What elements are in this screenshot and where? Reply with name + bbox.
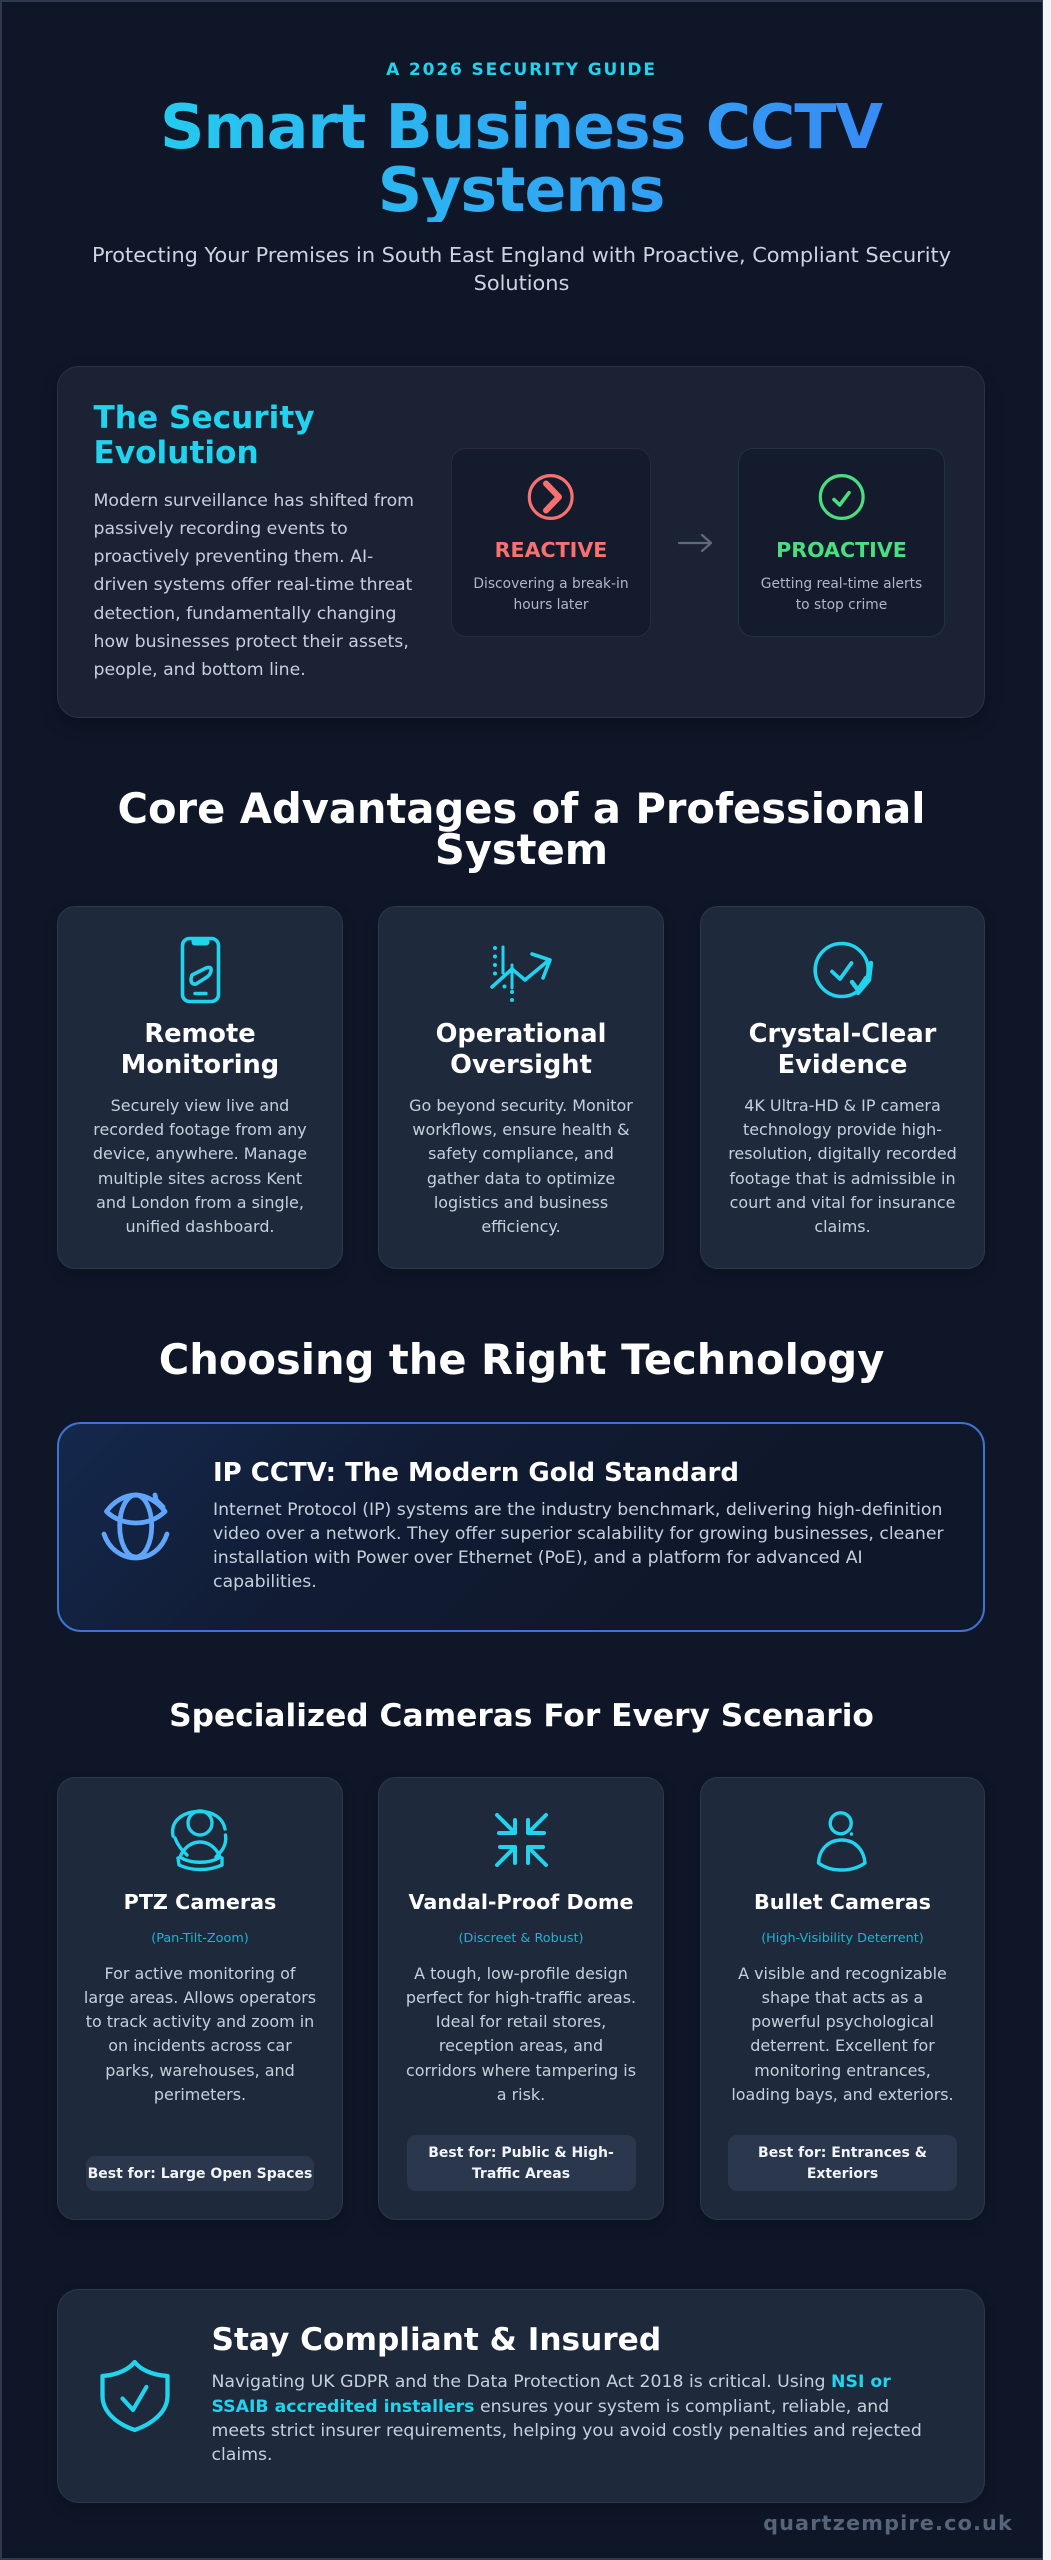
text: ptz description [84,1964,316,2104]
text: ip cctv description: Internet Protocol (IP) systems are the industry benchmark, delivering high-definition [213,1500,942,1520]
text: vandal-proof description: A tough, low-profile design [414,1964,628,1982]
text: bullet description: loading bays, and exteriors. [731,2085,954,2104]
text: proactive description: Getting real-time alerts [761,576,922,592]
badge: best for entrances and exteriors [728,2135,957,2191]
text: ip cctv description: video over a network. They offer superior scalability for growing businesses, cleaner [213,1524,944,1544]
icon: verified evidence [813,942,874,998]
text: reactive description: Discovering a break-in [473,576,629,592]
badge text: public and high-traffic areas [428,2145,614,2182]
title: operational oversight: Operational [436,1019,606,1049]
text: ptz description: perimeters. [154,2085,246,2104]
panel: ip cctv [57,1422,985,1632]
text: operational oversight description: Go beyond security. Monitor [409,1096,633,1115]
panel: reactive [451,448,651,637]
title: ip cctv: IP CCTV: The Modern Gold Standard [213,1458,739,1488]
title: remote monitoring: Remote [144,1019,256,1049]
text: ptz description: on incidents across car [108,2036,292,2055]
heading: core advantages [117,784,926,874]
text: proactive description: to stop crime [796,597,887,613]
text: crystal-clear evidence description: resolution, digitally recorded [728,1144,957,1163]
text: remote monitoring description: device, anywhere. Manage [93,1144,307,1163]
text: remote monitoring description: multiple sites across Kent [98,1169,302,1188]
icon: reactive chevron [528,474,574,520]
text: remote monitoring description: and London from a single, [96,1193,304,1212]
text: ip cctv description [213,1500,944,1592]
panel: proactive [738,448,945,637]
text: ip cctv description: installation with Power over Ethernet (PoE), and a platform for advanced AI [213,1548,863,1568]
panel: remote monitoring [57,906,343,1269]
text: operational oversight description: gather data to optimize [427,1169,615,1188]
text: crystal-clear evidence description [728,1096,957,1236]
icon: proactive check [818,474,865,520]
text: compliance description: claims. [212,2445,273,2465]
title: ptz cameras: PTZ Cameras [124,1890,276,1914]
text: reactive description: hours later [513,597,589,613]
text: evolution description: detection, fundamentally changing [94,604,396,624]
title: bullet cameras: Bullet Cameras [754,1890,931,1914]
text: operational oversight description: safety compliance, and [428,1144,614,1163]
icon: ptz camera [170,1809,228,1872]
text: operational oversight description: workflows, ensure health & [412,1120,630,1139]
subtitle: Solutions [474,271,569,295]
text: evolution description [94,491,414,680]
text: evolution description: Modern surveillance has shifted from [94,491,414,511]
text: remote monitoring description: Securely view live and [111,1096,289,1115]
icon: phone [180,936,220,1004]
icon: trend chart [490,946,552,1002]
title: crystal-clear evidence: Crystal-Clear [749,1019,936,1049]
subtitle: discreet and robust: (Discreet & Robust) [458,1931,584,1946]
panel: the security evolution [57,366,985,718]
text: crystal-clear evidence description: 4K Ultra-HD & IP camera [744,1096,941,1115]
icon: inward arrows [494,1812,548,1868]
text: vandal-proof description: a risk. [497,2085,545,2104]
badge text: entrances and exteriors [758,2145,927,2182]
panel: ptz cameras [57,1777,343,2220]
heading: the security evolution: The Security [94,400,315,436]
text: evolution description: how businesses protect their assets, [94,632,409,652]
text: vandal-proof description: reception areas, and [439,2036,603,2055]
text: bullet description [731,1964,954,2104]
text: ptz description: large areas. Allows operators [84,1988,316,2007]
text: ptz description: parks, warehouses, and [105,2061,295,2080]
title: remote monitoring [121,1019,279,1080]
panel: vandal-proof dome [378,1777,664,2220]
title: operational oversight [436,1019,606,1080]
title [57,96,985,222]
title: operational oversight: Oversight [450,1050,592,1080]
text: evolution description: driven systems offer real-time threat [94,575,412,595]
heading: choosing the right technology: Choosing the Right Technology [159,1335,884,1384]
text: reactive description [473,576,629,613]
label: proactive: PROACTIVE [776,538,907,562]
text: remote monitoring description [93,1096,307,1236]
heading: the security evolution [94,400,315,471]
text: crystal-clear evidence description: court and vital for insurance [730,1193,955,1212]
text: evolution description: people, and bottom line. [94,660,306,680]
text: compliance description: Navigating UK GDPR and the Data Protection Act 2018 is critical. Using NSI or [212,2372,891,2392]
icon: bullet camera [816,1811,867,1872]
text: ptz description: For active monitoring of [105,1964,295,1982]
badge text: public and high-traffic areas: Best for: Public & High- [428,2145,614,2161]
text: remote monitoring description: recorded footage from any [93,1120,307,1139]
panel: crystal-clear evidence [700,906,985,1269]
text: compliance description: meets strict insurer requirements, helping you avoid costly penalties and rejected [212,2421,922,2441]
text: vandal-proof description: perfect for high-traffic areas. [406,1988,636,2007]
subtitle: Protecting Your Premises in South East England with Proactive, Compliant Security [92,243,951,267]
text: remote monitoring description: unified dashboard. [125,1217,275,1236]
text: evolution description: passively recording events to [94,519,348,539]
title: Smart Business CCTV [160,91,882,163]
panel: operational oversight [378,906,664,1269]
text: operational oversight description [409,1096,633,1236]
text: crystal-clear evidence description: footage that is admissible in [729,1169,956,1188]
text: ip cctv description: capabilities. [213,1572,317,1592]
badge text: large open spaces: Best for: Large Open Spaces [88,2166,312,2182]
badge: best for large open spaces [86,2156,314,2191]
heading: core advantages: System [435,825,608,874]
text: crystal-clear evidence description: technology provide high- [743,1120,942,1139]
badge text: entrances and exteriors: Exteriors [807,2166,878,2182]
heading: the security evolution: Evolution [94,435,259,471]
badge: best for public and high-traffic areas [407,2135,636,2191]
text: bullet description: deterrent. Excellent for [750,2036,935,2055]
text: bullet description: A visible and recognizable [738,1964,947,1982]
title: crystal-clear evidence: Evidence [778,1050,907,1080]
title: stay compliant and insured: Stay Compliant & Insured [212,2322,661,2358]
subtitle: pan-tilt-zoom: (Pan-Tilt-Zoom) [151,1931,249,1946]
text: operational oversight description: logistics and business [434,1193,608,1212]
subtitle: high-visibility deterrent: (High-Visibility Deterrent) [761,1931,924,1946]
panel: bullet cameras [700,1777,985,2220]
text: proactive description [761,576,922,613]
text: vandal-proof description: corridors where tampering is [406,2061,636,2080]
label: reactive: REACTIVE [495,538,607,562]
icon: shield [100,2360,170,2432]
text: bullet description: shape that acts as a [762,1988,923,2007]
title: remote monitoring: Monitoring [121,1050,279,1080]
text: bullet description: monitoring entrances, [754,2061,931,2080]
heading: specialized cameras: Specialized Cameras For Every Scenario [169,1698,874,1734]
eyebrow: a 2026 security guide: A 2026 SECURITY GUIDE [386,60,657,80]
text: compliance description: SSAIB accredited installers ensures your system is compliant, reliable, and [212,2397,889,2417]
subtitle [92,243,951,295]
title: crystal-clear evidence [749,1019,936,1080]
text: evolution description: proactively preventing them. AI- [94,547,373,567]
watermark: quartzempire.co.uk [763,2511,1013,2535]
text: vandal-proof description: Ideal for retail stores, [436,2012,606,2031]
arrow: reactive to proactive [678,534,712,552]
text: crystal-clear evidence description: claims. [814,1217,871,1236]
icon: ip globe [102,1492,170,1560]
title: vandal-proof dome: Vandal-Proof Dome [408,1890,633,1914]
badge text: public and high-traffic areas: Traffic Areas [472,2166,570,2182]
text: vandal-proof description [406,1964,636,2104]
text: operational oversight description: efficiency. [481,1217,561,1236]
badge text: entrances and exteriors: Best for: Entrances & [758,2145,927,2161]
title: Systems [378,154,664,226]
text: bullet description: powerful psychological [751,2012,934,2031]
text: compliance description [212,2372,922,2465]
heading: core advantages: Core Advantages of a Professional [117,784,926,833]
panel: stay compliant and insured [57,2289,985,2503]
text: ptz description: to track activity and zoom in [86,2012,314,2031]
